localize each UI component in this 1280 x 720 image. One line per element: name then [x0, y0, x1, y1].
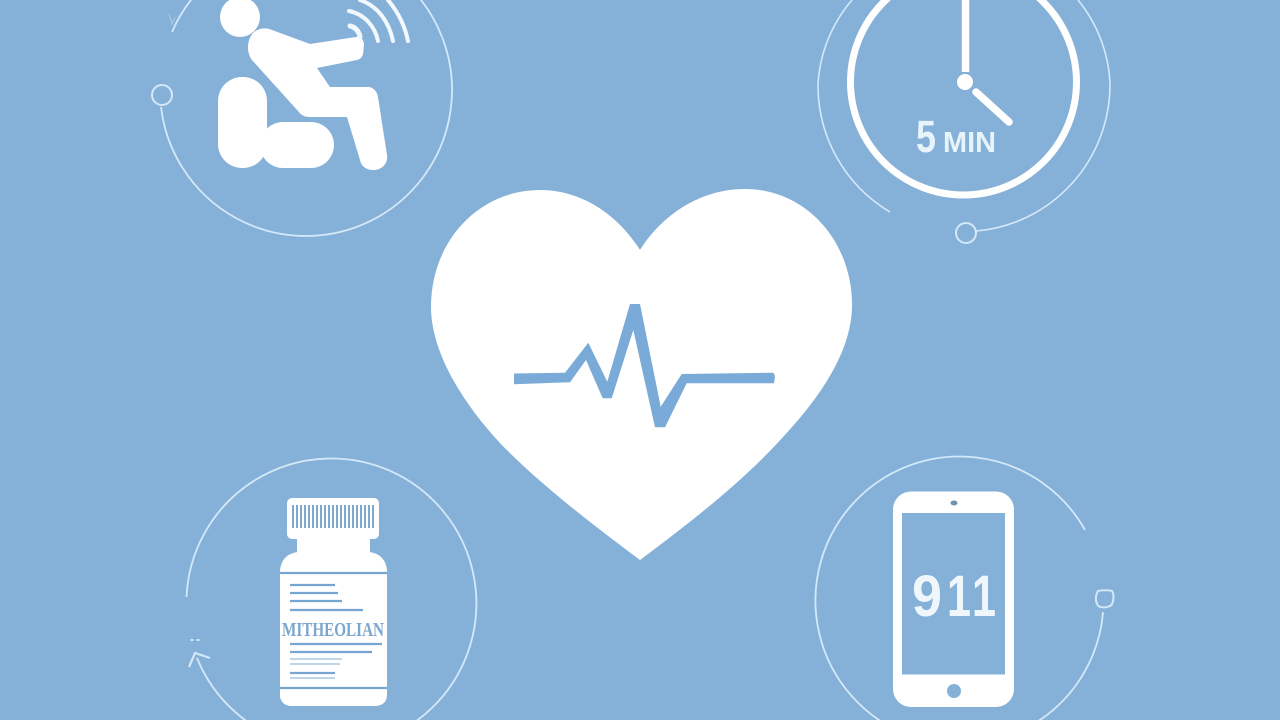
label: 911: 1	[947, 564, 971, 629]
icon: clock	[850, 0, 1076, 195]
label: 5 min: 5	[916, 111, 936, 162]
panel: call 911	[815, 457, 1114, 720]
icon: medicine bottle	[280, 498, 387, 706]
icon: phone	[893, 492, 1014, 707]
panel: recognize symptoms	[152, 0, 452, 236]
icon: seated person with pain signal	[218, 0, 408, 170]
icon: heart with pulse line	[431, 189, 852, 560]
label: 911	[912, 564, 996, 629]
progress ring	[815, 457, 1114, 720]
bottle label lines	[280, 573, 387, 688]
progress ring	[152, 0, 452, 236]
panel: take medication	[186, 458, 476, 720]
pulse line	[514, 304, 775, 427]
progress ring	[818, 0, 1110, 243]
panel: five minute timer	[818, 0, 1110, 243]
bottle label text: MITHEOLIAN	[282, 619, 384, 641]
bottle cap ridges	[293, 505, 373, 528]
panel: five minute timer: MIN	[943, 127, 996, 159]
label: 911: 1	[972, 564, 996, 629]
progress ring	[186, 458, 476, 720]
label: 911: 9	[912, 564, 942, 629]
